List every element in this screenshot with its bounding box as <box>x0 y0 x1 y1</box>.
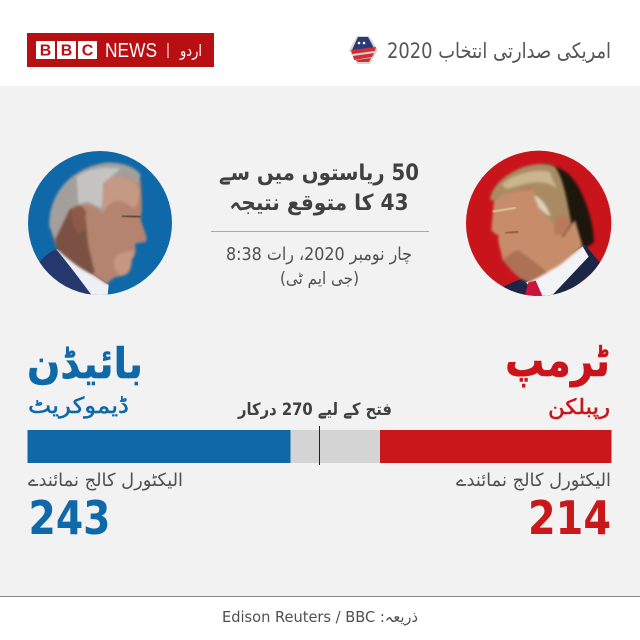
BBC News Urdu logo: C <box>82 42 94 60</box>
heading divider <box>211 231 429 232</box>
timestamp: چار نومبر 2020، رات 8:38 <box>226 244 412 265</box>
portrait: Biden <box>28 151 172 302</box>
value: Trump 214: 214 <box>528 491 611 545</box>
party: Republican: رپبلکن <box>548 395 610 419</box>
value: Biden 243: 243 <box>28 491 110 545</box>
timestamp <box>226 244 412 289</box>
electoral vote bar <box>28 426 612 465</box>
footer divider <box>0 596 640 597</box>
source note: ذریعہ: Edison Reuters / BBC <box>222 608 418 626</box>
candidate name: Biden: بائیڈن <box>27 339 143 388</box>
heading: results from 43 of 50 states: 50 ریاستوں میں سے <box>219 161 419 186</box>
candidate name: Trump: ٹرمپ <box>505 333 610 387</box>
portrait: Trump <box>466 151 611 302</box>
heading: results from 43 of 50 states <box>219 161 419 216</box>
label: Trump electoral college: الیکٹورل کالج نمائندے <box>456 470 611 491</box>
header title: امریکی صدارتی انتخاب 2020 <box>387 39 611 63</box>
BBC News Urdu logo: NEWS <box>105 40 157 62</box>
label: Biden electoral college: الیکٹورل کالج نمائندے <box>28 470 183 491</box>
BBC News Urdu logo: اردو <box>179 41 202 61</box>
heading: results from 43 of 50 states: 43 کا متوقع نتیجہ <box>230 191 408 216</box>
icon: US election flag badge <box>349 36 378 64</box>
party: Democrat: ڈیموکریٹ <box>28 394 129 419</box>
page background panel <box>0 86 640 596</box>
timestamp: (جی ایم ٹی) <box>280 269 359 289</box>
label: 270 needed to win: فتح کے لیے 270 درکار <box>237 400 392 420</box>
BBC News Urdu logo: B <box>61 42 72 60</box>
BBC News Urdu logo <box>27 33 214 67</box>
BBC News Urdu logo: B <box>40 42 51 60</box>
